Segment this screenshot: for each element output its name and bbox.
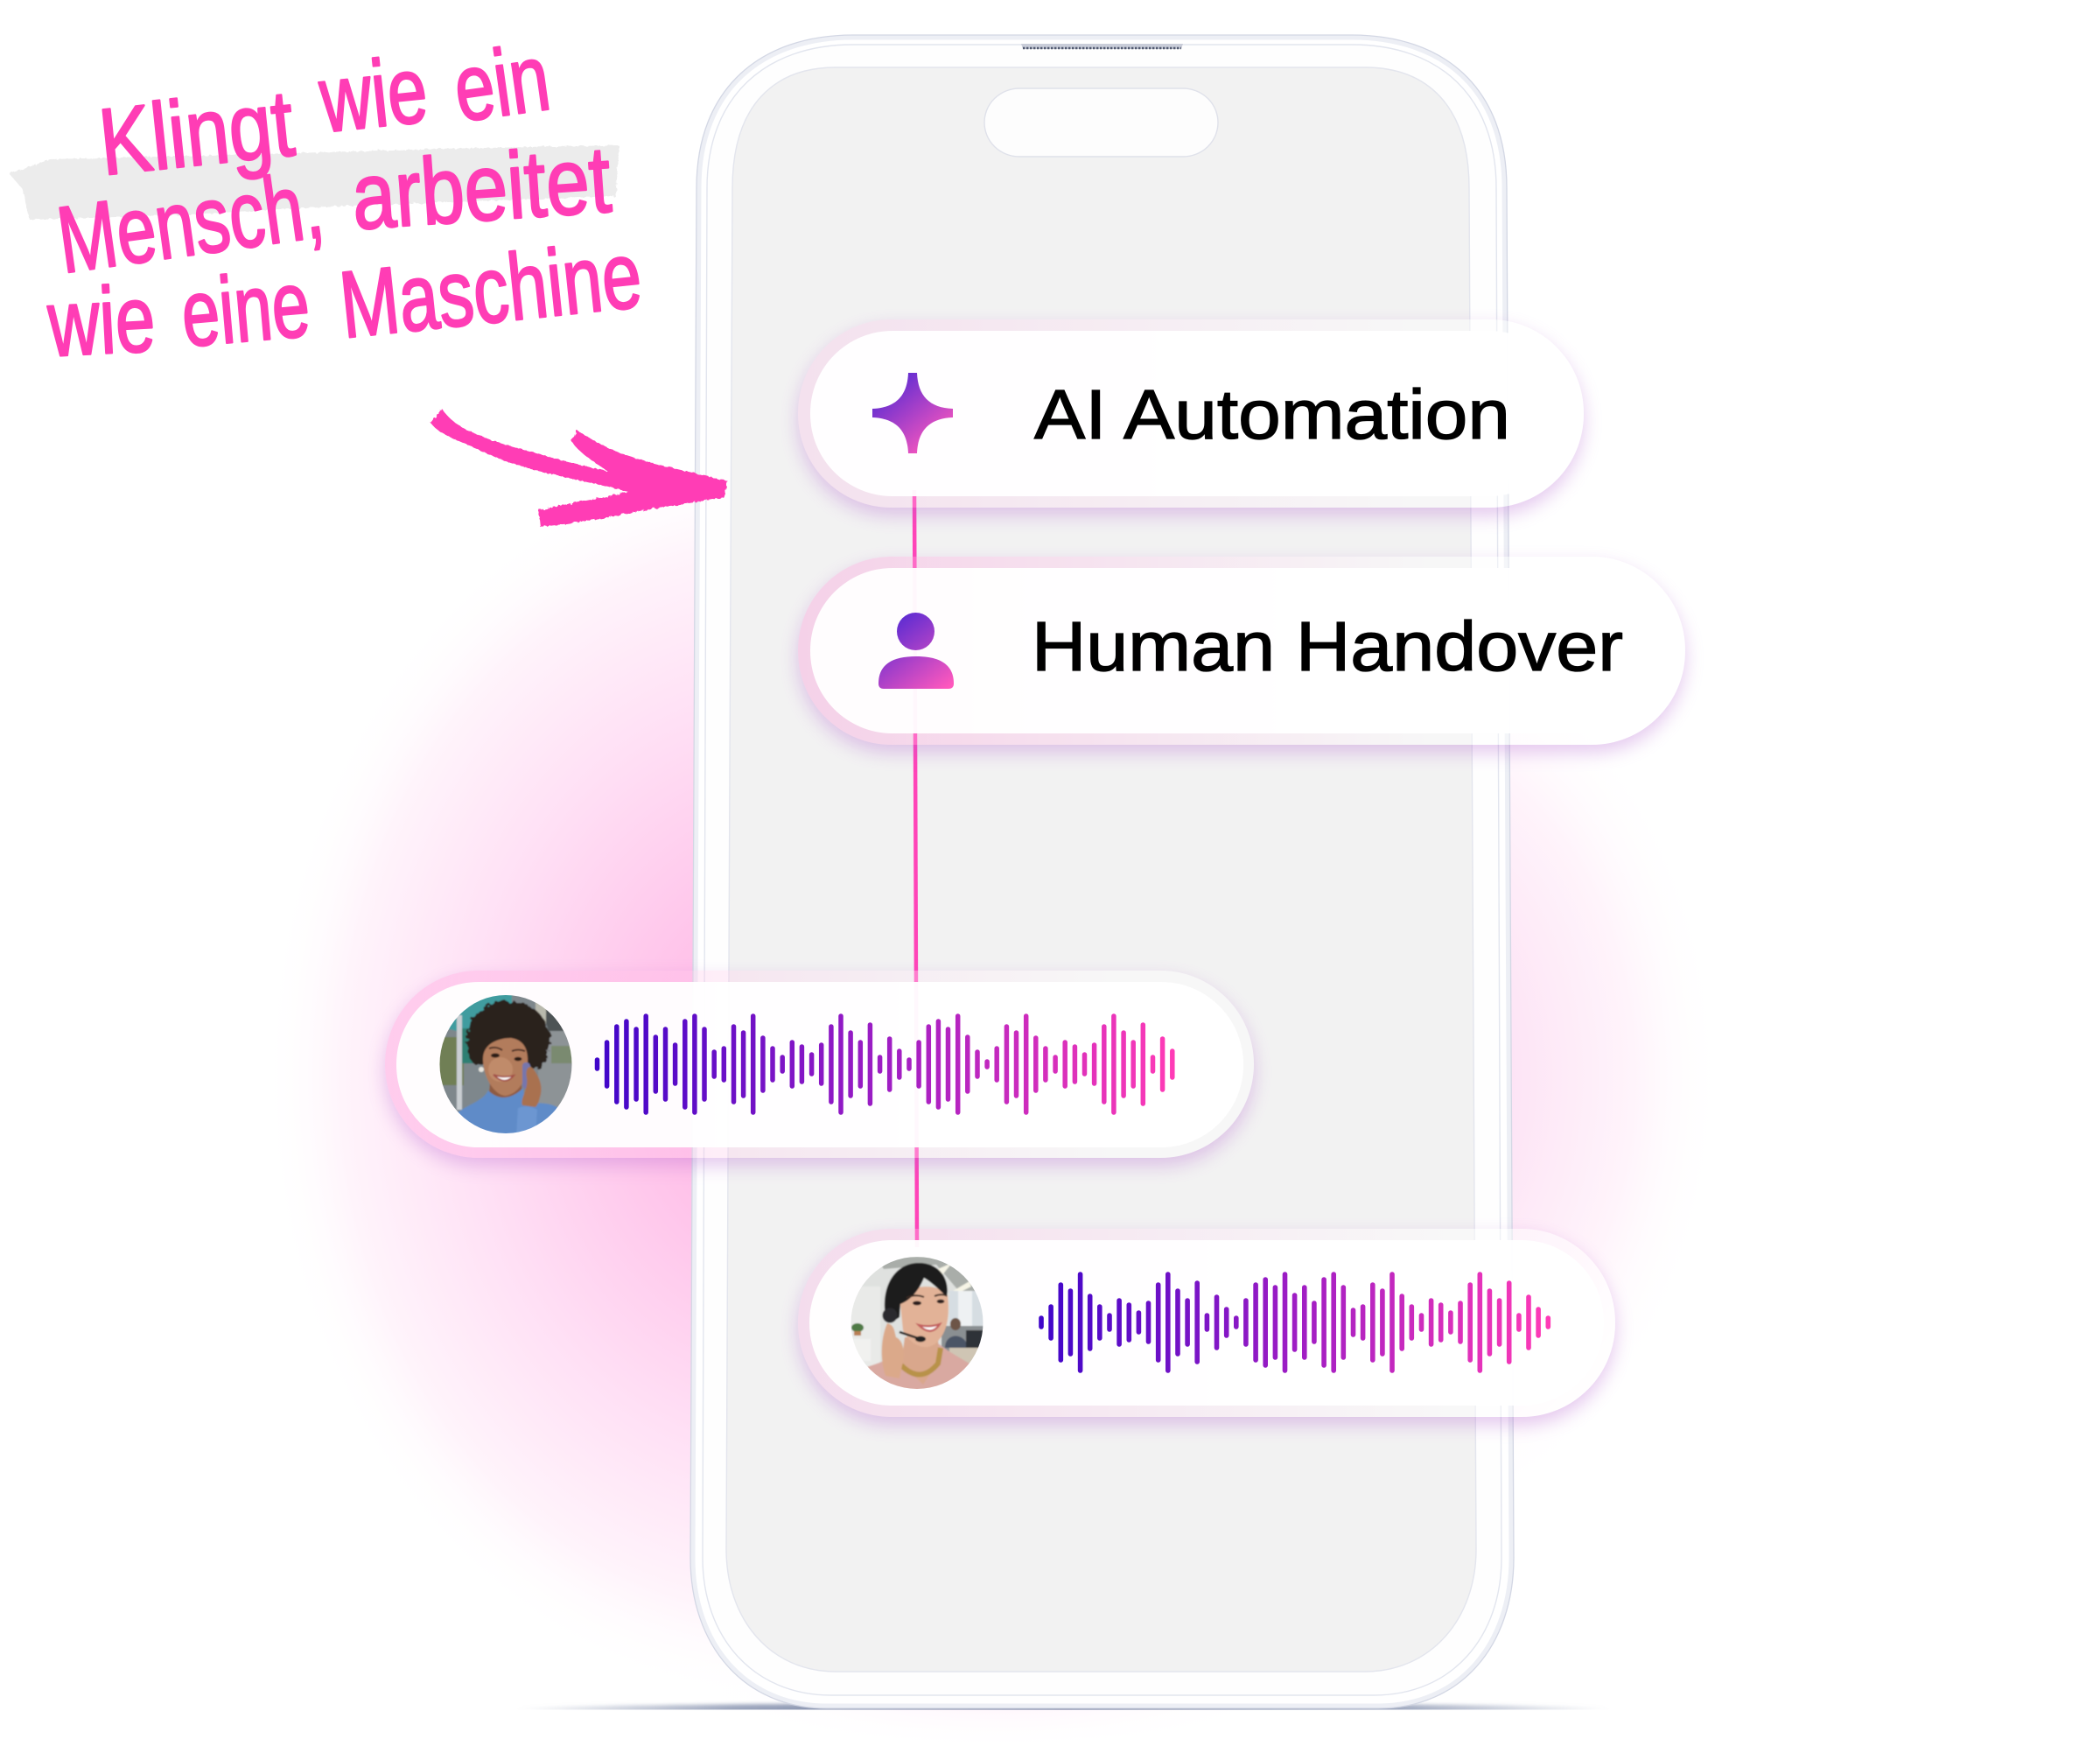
waveform: caller [597,1016,1172,1112]
label: Human Handover: Human Handover [1032,607,1623,685]
icon: person [878,613,954,689]
line 1: ein [447,24,556,142]
hair [885,1263,948,1321]
smile [494,1075,514,1081]
label: AI Automation: AI Automation [1034,375,1510,453]
pill: caller voice [385,971,1254,1158]
speaker grille [1021,44,1183,49]
line 3: Maschine [335,221,647,358]
phone [522,1062,530,1089]
line 3 [45,221,647,376]
avatar: woman on phone [439,995,572,1133]
line 3: eine [177,250,313,367]
pill inner surface [809,1240,1604,1406]
pill inner surface [810,331,1572,496]
necklace [901,1348,941,1375]
phone body [690,35,1514,1708]
grey brush stroke [10,145,619,220]
pill inner surface [810,568,1673,733]
eyes and brows [906,1294,946,1298]
icon: sparkle [872,373,953,453]
line 2: arbeitet [348,126,614,249]
waveform: agent [1041,1274,1548,1371]
line 2: Mensch, [51,151,329,293]
pill: Human Handover [798,557,1685,745]
line 1 [94,24,556,195]
phone outer edge [690,35,1514,1708]
neck [488,1083,522,1097]
headset [882,1308,898,1323]
hand [882,1323,904,1378]
hand-drawn arrow [430,409,728,527]
phone floor shadow [544,1701,1583,1710]
hand [522,1067,542,1107]
pink glow behind phone [262,446,1724,1746]
shirt [868,1343,970,1389]
face [900,1287,948,1347]
handwritten headline [45,24,647,376]
sweater [458,1088,557,1133]
earring [479,1067,484,1072]
phone screen [726,67,1476,1672]
smile [919,1324,940,1331]
line 1: Klingt [94,69,298,195]
line 3: wie [45,265,158,376]
hair [467,1001,550,1069]
line 1: wie [314,36,432,152]
eyebrows and eyes [489,1048,525,1051]
pill: AI Automation [798,319,1584,508]
face [483,1038,528,1096]
phone mockup [690,35,1514,1708]
pill: agent voice [798,1229,1615,1417]
pill inner surface [396,982,1243,1147]
camera notch [984,88,1218,157]
neck and chest [901,1337,939,1385]
sleeve [516,1106,537,1132]
connector line [914,490,917,1247]
avatar: agent with headset [849,1254,987,1393]
phone inner rim [703,45,1502,1695]
line 2 [51,126,614,293]
